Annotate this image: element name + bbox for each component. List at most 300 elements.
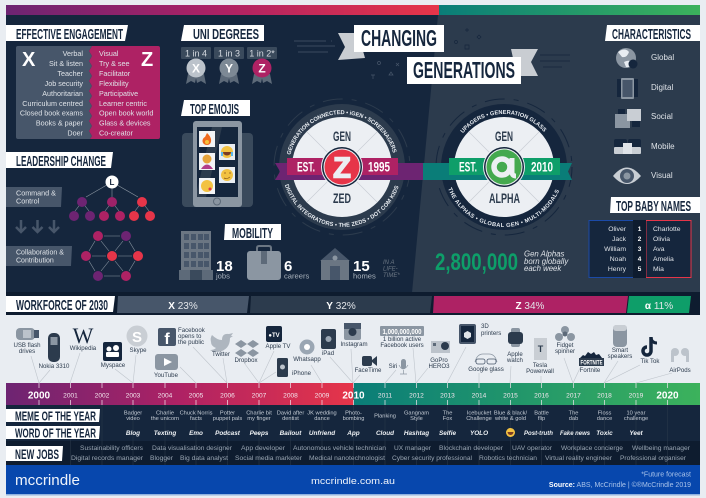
callout: one billion Facebook users: 1,000,000,000: [382, 329, 422, 336]
timeline band: 2000: [28, 390, 51, 402]
stat: 6 careers: careers: [284, 272, 310, 280]
icon: Facebook: Facebook: [178, 327, 206, 334]
icon: Apple watch: watch: [506, 357, 523, 364]
ribbon: est 1995: [275, 158, 424, 180]
icon: FaceTime: [355, 356, 382, 374]
curved names: gen Z: DIGITAL INTEGRATORS • THE ZEDS • DOT COM KIDS: [284, 184, 398, 227]
comparison table X versus Z: Learner centric: [99, 99, 147, 108]
medal: 1 in 3 Y: Y: [225, 62, 233, 76]
comparison table X versus Z: Try & see: [99, 59, 130, 68]
ribbon: est 2010: [423, 158, 572, 180]
row: words: Selfie: [439, 430, 456, 437]
row: memes: Badger: [124, 410, 142, 416]
comparison table X versus Z: Curriculum centred: [22, 99, 83, 108]
row: new jobs: Digital records manager: [71, 456, 143, 462]
icon: Smart speakers: speakers: [608, 353, 632, 360]
table: baby names: 1: [638, 226, 642, 233]
heading: workforce of 2030: WORKFORCE OF 2030: [16, 297, 108, 314]
row: memes: flip: [538, 416, 545, 422]
icon: Myspace: [101, 342, 126, 369]
row: memes: challenge: [624, 416, 648, 422]
timeline band: 2014: [472, 392, 487, 400]
curved names: gen alpha: UPAGERS • GENERATION GLASS: [460, 110, 546, 133]
item: global: Global: [651, 53, 674, 62]
stat: 18 jobs: jobs: [215, 272, 230, 280]
timeline band: 2003: [126, 392, 141, 400]
icon: Nokia 3310: Nokia 3310: [39, 363, 70, 370]
icon: Skype: S: [132, 329, 142, 346]
bar: Z 34%: [433, 296, 628, 313]
medal: 1 in 4 X: [181, 47, 211, 84]
row: words: Unfriend: [309, 430, 336, 437]
icon: Instagram: Instagram: [340, 341, 368, 348]
row: new jobs: UX manager: [394, 446, 431, 452]
row: memes: my finger: [247, 416, 271, 422]
icon: 3D printers: 3D: [481, 323, 489, 330]
footer: [6, 465, 700, 496]
comparison table X versus Z: Authoritarian: [42, 89, 83, 98]
row: memes: dance: [597, 416, 612, 422]
timeline band: 2018: [597, 392, 612, 400]
icon: office building: [179, 231, 213, 280]
heading: effective engagement: [6, 25, 128, 43]
medal: 1 in 3 Y: 1 in 3: [218, 48, 240, 58]
stat: 2,800,000 gen alphas: 2,800,000: [435, 249, 518, 276]
row: memes: Icebucket: [467, 410, 492, 416]
stat: 2,800,000 gen alphas: born globally: [524, 257, 569, 266]
medal: 1 in 4 X: X: [192, 62, 200, 76]
icon: iPad: iPad: [322, 350, 334, 357]
labels: gen and zed: ZED: [333, 190, 351, 206]
heading: uni degrees: UNI DEGREES: [193, 26, 259, 43]
timeline band: 2010: [342, 390, 365, 402]
row: memes: [124, 410, 648, 422]
timeline band: 2006: [220, 392, 235, 400]
row: words: Toxic: [596, 430, 613, 437]
heading: new jobs: [6, 446, 63, 462]
icon: Skype: [126, 326, 148, 354]
row: memes: Charlie: [156, 410, 174, 416]
curved names: gen Z: [284, 110, 398, 227]
panel: dark background left and right: [6, 15, 700, 293]
row: words: Emo: [189, 430, 203, 437]
callout: one billion Facebook users: 1 billion active: [383, 336, 422, 343]
timeline band: 2020: [656, 390, 679, 402]
icon: Twitter: [210, 333, 233, 358]
medal: 1 in 4 X: 1 in 4: [185, 48, 207, 58]
row: words: Blog: [126, 430, 140, 437]
icon: AirPods: [669, 348, 691, 374]
item: social: Social: [651, 112, 673, 121]
comparison table X versus Z: Glass & devices: [99, 118, 151, 128]
row: new jobs: Big data analyst: [180, 456, 228, 462]
icon: Fidget spinner: Fidget: [557, 342, 574, 349]
comparison table X versus Z: Flexibility: [99, 79, 129, 88]
item: visual: [613, 168, 673, 184]
row: memes: Photo-: [345, 410, 362, 416]
timeline band: 2015: [503, 392, 518, 400]
panel: top baby names: [589, 197, 700, 278]
row: memes: The: [569, 410, 578, 416]
table: baby names: Charlotte: [653, 226, 681, 233]
curved names: gen alpha: THE ALPHAS • GLOBAL GEN • MULTI-MODALS: [448, 187, 559, 227]
icon: Facebook: [158, 327, 206, 348]
table: baby names: Noah: [610, 256, 626, 263]
comparison table X versus Z: Z: [141, 49, 153, 71]
diagram: hierarchy tree: [69, 176, 155, 221]
table: baby names: Henry: [608, 266, 627, 273]
source note: [549, 472, 691, 489]
row: memes: Charlie bit: [246, 410, 272, 416]
note: in a lifetime: LIFE-: [383, 266, 398, 272]
row: words: Cloud: [376, 430, 395, 437]
icon: AirPods: AirPods: [669, 367, 691, 374]
diagram: hierarchy tree: L: [110, 178, 115, 187]
heading: leadership change: LEADERSHIP CHANGE: [16, 153, 106, 170]
row: memes: dentist: [282, 416, 299, 422]
label: command and control: [6, 187, 62, 207]
row: memes: Challenge: [466, 416, 492, 422]
item: digital: [617, 78, 673, 99]
row: words: [126, 428, 644, 437]
bar: Y 32%: [250, 296, 432, 313]
row: new jobs: Blogger: [150, 456, 173, 462]
row: memes: Potter: [220, 410, 235, 416]
title: changing generations: GENERATIONS: [413, 57, 515, 83]
labels: gen and zed: [333, 128, 351, 206]
diagram: collaboration network: [81, 231, 143, 281]
panel: workforce of 2030: [6, 292, 700, 315]
row: new jobs: App developer: [241, 446, 285, 452]
comparison table X versus Z: Facilitator: [99, 69, 131, 78]
badge: gen alpha: [423, 98, 572, 236]
row: new jobs: Blockchain developer: [439, 446, 503, 452]
row: memes: Fox: [443, 416, 452, 422]
row: memes: Battle: [534, 410, 549, 416]
label: collaboration and contribution: Collaboration &: [16, 250, 64, 256]
source note: *Future forecast: [641, 472, 691, 478]
panel: effective engagement: [6, 25, 160, 139]
heading: top emojis: TOP EMOJIS: [190, 101, 239, 118]
icon: Facebook: the public: [178, 339, 204, 346]
icon: Apple TV: ●TV: [268, 333, 280, 339]
icon: Myspace: Myspace: [101, 362, 126, 369]
item: digital: Digital: [651, 83, 673, 92]
heading: mobility: [224, 224, 281, 242]
table: baby names: Ava: [653, 246, 665, 253]
item: mobile: [614, 139, 675, 154]
row: memes: Chuck Norris: [180, 410, 213, 416]
row: new jobs: UAV operator: [512, 446, 552, 452]
icon: Tik Tok: [641, 337, 660, 365]
icon: Tik Tok: Tik Tok: [641, 358, 660, 365]
comparison table X versus Z: Co-creator: [99, 128, 134, 138]
icon: Skype: Skype: [130, 347, 147, 354]
panel: leadership change: [6, 152, 155, 281]
timeline band: 2005: [189, 392, 204, 400]
row: new jobs: Workplace concierge: [561, 446, 624, 452]
row: new jobs: Professional organiser: [620, 456, 686, 462]
medal: 1 in 2 Z: 1 in 2*: [249, 48, 275, 58]
badge: gen Z: [274, 98, 423, 236]
label: command and control: Control: [16, 196, 40, 206]
icon: Siri: Siri: [389, 363, 397, 370]
icon: Tesla Powerwall: T: [538, 344, 544, 354]
ribbon: est 1995: EST.: [297, 158, 315, 174]
label: collaboration and contribution: Contribution: [16, 258, 54, 264]
stat: 18 jobs: 18: [216, 258, 233, 275]
labels: gen and alpha: GEN: [495, 128, 513, 144]
icon: iPad: [321, 329, 336, 357]
row: memes: Blue & black/: [494, 410, 528, 416]
icon: Wikipedia: Wikipedia: [70, 345, 97, 352]
icon: Wikipedia: [70, 323, 97, 352]
item: mobile: Mobile: [651, 142, 675, 151]
heading: leadership change: [6, 152, 113, 170]
icon: Twitter: Twitter: [212, 351, 230, 358]
icon: Apple watch: Apple: [507, 351, 523, 358]
icon: Fortnite: FORTNITE: [580, 360, 602, 366]
timeline band: 2012: [409, 392, 424, 400]
icon: USB flash drives: USB flash: [13, 342, 41, 349]
icon: iPhone: iPhone: [292, 370, 312, 377]
row: words: Texting: [154, 430, 176, 437]
row: new jobs: Sustainability officers: [80, 446, 143, 452]
icon: Google glass: Google glass: [468, 366, 504, 373]
stat: 2,800,000 gen alphas: Gen Alphas: [524, 250, 565, 258]
panel: characteristics: [605, 25, 700, 184]
icon: Dropbox: Dropbox: [234, 357, 258, 364]
comparison table X versus Z: Sit & listen: [49, 59, 83, 68]
icon: Wikipedia: W: [73, 323, 94, 348]
stat: 15 homes: homes: [353, 272, 376, 280]
item: visual: Visual: [651, 171, 673, 180]
emblem: Z: [321, 146, 363, 188]
icon: Dropbox: [234, 340, 259, 364]
comparison table X versus Z: Visual: [99, 49, 119, 58]
stat: 6 careers: [284, 258, 310, 280]
row: memes: Planking: [374, 414, 396, 420]
comparison table X versus Z: Doer: [67, 128, 84, 138]
row: memes: 10 year: [627, 410, 646, 416]
timeline band: 2017: [566, 392, 581, 400]
heading: new jobs: NEW JOBS: [15, 446, 59, 462]
bar: X 23%: X 23%: [168, 301, 198, 312]
icon: Apple TV: [266, 326, 291, 350]
stat: 2,800,000 gen alphas: each week: [524, 264, 562, 273]
row: words: Bailout: [280, 430, 302, 437]
stat: 6 careers: 6: [284, 258, 292, 275]
bar: X 23%: [117, 296, 249, 313]
table: baby names: Olivia: [653, 236, 670, 243]
icon: Tesla Powerwall: Powerwall: [526, 368, 554, 375]
icon: 3D printers: [459, 323, 501, 344]
row: new jobs: Robotics technician: [479, 456, 537, 462]
icon: Fortnite: Fortnite: [580, 367, 601, 374]
timeline band: 2016: [534, 392, 549, 400]
icon: 3D printers: printers: [481, 330, 501, 337]
medal: 1 in 2 Z: Z: [258, 62, 266, 76]
medal: 1 in 2 Z: [247, 47, 277, 84]
heading: meme of the year: [6, 408, 100, 424]
icon: Siri: [389, 359, 408, 374]
icon: iPhone: [277, 358, 312, 377]
bar: Z 34%: Z 34%: [516, 301, 545, 312]
icon: USB flash drives: [13, 328, 41, 355]
callout: one billion Facebook users: Facebook users: [380, 342, 424, 349]
emblem: alpha: [483, 146, 525, 188]
top colour bar: [6, 5, 700, 15]
heading: workforce of 2030: [6, 296, 115, 314]
ribbon: est 1995: 1995: [368, 158, 390, 174]
row: words: Fake news: [560, 430, 590, 437]
timeline band: 2009: [315, 392, 330, 400]
heading: word of the year: WORD OF THE YEAR: [15, 426, 96, 440]
comparison table X versus Z: Participative: [99, 89, 138, 98]
panel: top emojis: [181, 100, 253, 207]
comparison table X versus Z: [16, 46, 160, 139]
comparison table X versus Z: Books & paper: [36, 118, 84, 128]
icon: Fidget spinner: spinner: [555, 348, 575, 355]
icon: GoPro HERO3: GoPro: [430, 357, 448, 364]
icon: Google glass: [468, 354, 504, 373]
icon: Facebook: f: [164, 331, 170, 348]
row: memes: dab: [569, 416, 578, 422]
row: words: Yeet: [629, 430, 644, 437]
row: memes: bombing: [343, 416, 364, 422]
table: baby names: Oliver: [608, 226, 627, 233]
note: in a lifetime: [383, 260, 400, 279]
icon: Smart speakers: [608, 325, 632, 360]
row: words: Podcast: [215, 430, 241, 437]
stat: 15 homes: 15: [353, 258, 370, 275]
row: new jobs: Data visualisation designer: [152, 446, 232, 452]
title: changing generations: CHANGING: [361, 25, 437, 51]
row: memes: the unicorn: [151, 416, 179, 422]
row: memes: JK wedding: [307, 410, 337, 416]
source note: Source: ABS, McCrindle | ©®McCrindle 2019: [549, 481, 691, 489]
bar: alpha 11%: [627, 296, 691, 313]
panel: meme and word rows: [6, 405, 700, 465]
note: in a lifetime: IN A: [383, 260, 394, 266]
labels: gen and zed: GEN: [333, 128, 351, 144]
panel: uni degrees: [181, 25, 277, 84]
table: baby names: Amelia: [653, 256, 674, 263]
icon: Tesla Powerwall: Tesla: [533, 362, 548, 369]
icon: GoPro HERO3: [428, 341, 450, 370]
row: words: Hashtag: [404, 430, 429, 437]
row: memes: dance: [314, 416, 330, 422]
connector lines from icons to timeline: [31, 347, 672, 383]
comparison table X versus Z: Verbal: [63, 49, 83, 58]
row: words: Peeps: [250, 430, 269, 437]
row: new jobs: Autonomous vehicle technician: [293, 446, 386, 452]
bar: Y 32%: Y 32%: [326, 301, 356, 312]
stat: 15 homes: [353, 258, 376, 280]
icon: YouTube: YouTube: [154, 372, 179, 379]
logo: mccrindle: mccrindle: [15, 472, 80, 489]
timeline band: 2004: [158, 392, 173, 400]
row: new jobs: Medical nanotechnologist: [309, 456, 385, 462]
timeline band: 2019: [629, 392, 644, 400]
heading: meme of the year: MEME OF THE YEAR: [15, 408, 96, 424]
timeline band: 2008: [283, 392, 298, 400]
icon: Instagram: [340, 323, 368, 348]
bar: alpha 11%: α 11%: [645, 301, 673, 312]
medal: 1 in 3 Y: [214, 47, 244, 84]
row: words: Post-truth: [524, 430, 553, 437]
row: memes: Style: [410, 416, 423, 422]
ribbon: est 2010: EST.: [459, 158, 477, 174]
comparison table X versus Z: Teacher: [57, 69, 84, 78]
row: memes: The: [443, 410, 452, 416]
website: mccrindle.com.au: [311, 476, 395, 486]
heading: effective engagement: EFFECTIVE ENGAGEMENT: [16, 26, 123, 43]
item: social: [615, 109, 673, 128]
arrows: downward transition: [16, 220, 59, 232]
decorative marks left and right of title: [294, 28, 570, 79]
timeline band: 2002: [95, 392, 110, 400]
icon: Nokia 3310: [39, 333, 70, 370]
table: baby names: 2: [638, 236, 642, 243]
item: global: [616, 48, 674, 68]
icon: YouTube: [154, 354, 179, 379]
timeline band: [6, 383, 700, 405]
table: baby names: 5: [638, 266, 642, 273]
icon: Fortnite: [579, 352, 604, 374]
comparison table X versus Z: Job security: [45, 79, 83, 88]
labels: gen and alpha: [489, 128, 520, 206]
table: baby names: Jack: [612, 236, 627, 243]
comparison table X versus Z: Open book world: [99, 108, 153, 118]
curved names: gen Z: GENERATION CONNECTED • iGEN • SCREENAGERS: [287, 110, 396, 154]
row: memes: facts: [190, 416, 202, 422]
heading: mobility: MOBILITY: [232, 225, 273, 242]
icon: GoPro HERO3: HERO3: [428, 363, 450, 370]
icon: Smart speakers: Smart: [612, 347, 628, 354]
icon: Whatsapp: [293, 340, 321, 363]
callout: one billion Facebook users: [380, 326, 424, 349]
timeline band: 2011: [378, 392, 392, 400]
timeline icons and labels: [13, 323, 691, 379]
row: new jobs: Cyber security professional: [392, 456, 472, 462]
row: new jobs: Virtual reality engineer: [545, 456, 612, 462]
table: baby names: 3: [638, 246, 642, 253]
timeline band: 2013: [440, 392, 455, 400]
row: memes: puppet pals: [213, 416, 242, 422]
timeline band: 2001: [63, 392, 78, 400]
labels: gen and alpha: ALPHA: [489, 190, 520, 206]
icon: FaceTime: FaceTime: [355, 367, 382, 374]
icon: Apple watch: [506, 328, 523, 364]
row: memes: white & gold: [494, 416, 526, 422]
comparison table X versus Z: X: [22, 49, 36, 71]
table: baby names: [589, 220, 691, 278]
emblem: Z: Z: [333, 152, 351, 184]
icon: house: [320, 248, 350, 280]
row: memes: Floss: [598, 410, 611, 416]
row: memes: video: [126, 416, 140, 422]
note: in a lifetime: TIME*: [383, 273, 400, 279]
icon: USB flash drives: drives: [19, 348, 35, 355]
icon: phone with emojis: [182, 121, 253, 207]
title: changing generations: [338, 25, 538, 84]
row: new jobs: Wellbeing manager: [632, 446, 690, 452]
icon: Apple TV: Apple TV: [266, 343, 291, 350]
table: baby names: Mia: [653, 266, 664, 273]
icon: Facebook: opens to: [178, 333, 202, 340]
icon: Tesla Powerwall: [526, 338, 554, 375]
